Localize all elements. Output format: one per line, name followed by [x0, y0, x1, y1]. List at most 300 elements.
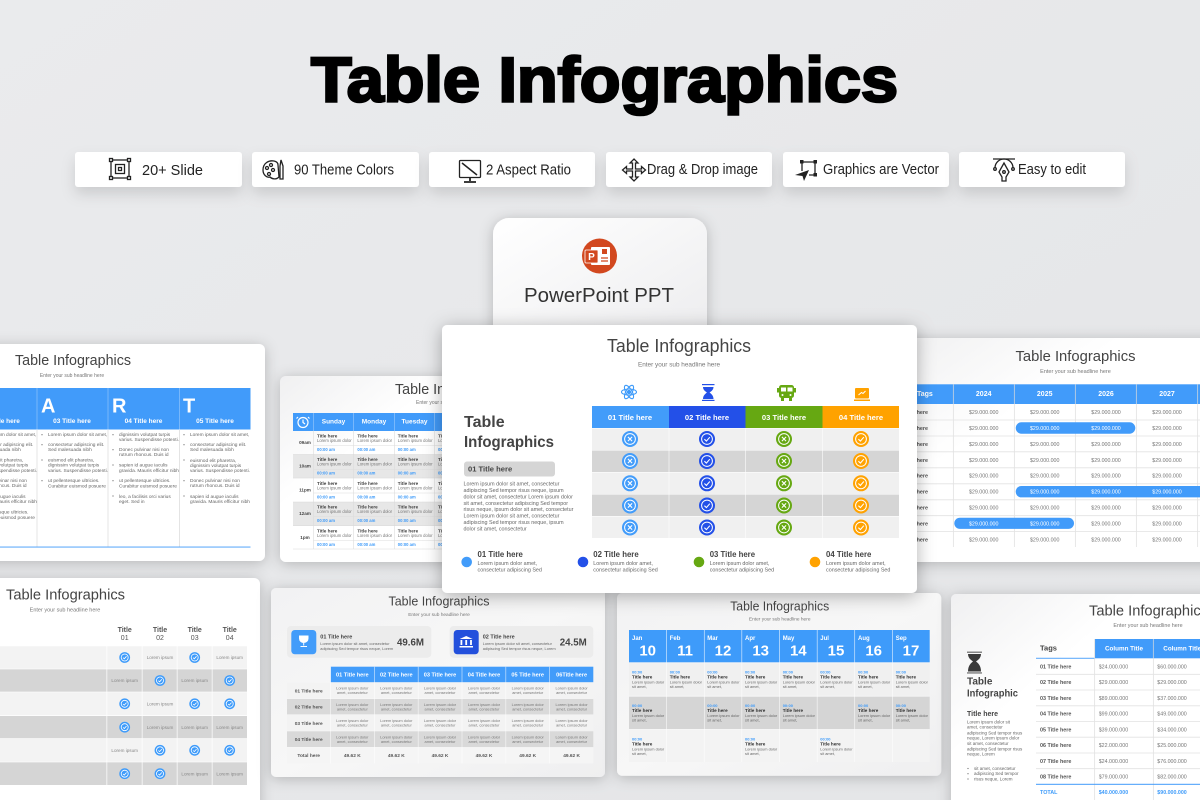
panel: column title table slide: sit amet, consectetur: [967, 741, 1009, 746]
panel: weekly schedule slide: Tuesday: [402, 418, 428, 426]
panel: weekly schedule slide: 00:00 am: [398, 542, 416, 547]
six column table: amet, consectetur: [425, 706, 456, 711]
panel: ART letter columns slide: [0, 344, 265, 561]
calendar row 2: Lorem ipsum dolor: [707, 713, 740, 718]
calendar row 1: Lorem ipsum dolor: [745, 680, 778, 684]
table rows: [592, 428, 899, 538]
stat: 49.6M: 49.6M: [397, 636, 424, 648]
panel: yearly values table slide: $29.000.000: [969, 537, 998, 543]
legend: 02: 02 Title here: [593, 550, 639, 559]
panel: yearly values table slide: Table Infographics: [1016, 348, 1136, 365]
calendar row 1: sit amet,: [707, 684, 722, 689]
panel: feature matrix slide: Lorem ipsum: [111, 678, 138, 683]
calendar row 3: Title here: [632, 741, 653, 746]
panel: ART letter columns slide: gravida. Mauris efficitur nibh: [190, 499, 250, 505]
panel: yearly values table slide: $29.000.000: [969, 458, 998, 464]
panel: yearly values table slide: $29.000.000: [1030, 442, 1059, 448]
calendar row 2: sit amet,: [632, 717, 647, 722]
pill: 20+ Slide: 20+ Slide: [142, 163, 203, 179]
calendar header dates: Sep: [896, 636, 907, 642]
icon: bus: [777, 385, 796, 401]
six column table: Lorem ipsum dolor: [468, 702, 501, 707]
six column table: amet, consectetur: [556, 722, 588, 728]
panel: column title table slide: 07 Title here: [1040, 759, 1071, 765]
panel: ART letter columns slide: rutrum rhoncus. Duis id: [119, 452, 169, 458]
panel: column title table slide: [951, 594, 1200, 800]
panel: weekly schedule slide: 11pm: [299, 487, 311, 492]
calendar row 2: 00:00: [858, 703, 869, 708]
six column table: amet, consectetur: [512, 722, 544, 728]
six column table: amet, consectetur: [337, 739, 368, 744]
panel: weekly schedule slide: 00:00 am: [357, 518, 376, 523]
panel: feature matrix slide: Lorem ipsum: [111, 748, 138, 753]
legend: 04: 04 Title here: [826, 550, 872, 559]
calendar row 2: Title here: [632, 708, 653, 713]
panel: yearly values table slide: $29.000.000: [969, 490, 998, 496]
calendar header dates: May: [783, 636, 795, 642]
panel: weekly schedule slide: 00:00 am: [317, 518, 335, 523]
panel: weekly schedule slide: Title here: [317, 434, 338, 438]
panel: yearly values table slide: here: [917, 522, 928, 528]
calendar row 2: sit amet,: [707, 717, 722, 722]
calendar row 2: Title here: [896, 708, 916, 713]
calendar header dates: 11: [677, 642, 693, 660]
legend: 04: Lorem ipsum dolor amet,: [826, 561, 886, 567]
calendar row 1: Lorem ipsum dolor: [896, 680, 929, 684]
panel: weekly schedule slide: Lorem ipsum dolor: [357, 462, 393, 467]
panel: column title table slide: 03 Title here: [1040, 696, 1071, 702]
six column table: Lorem ipsum dolor: [424, 734, 457, 739]
panel: ART letter columns slide: 04 Title here: [125, 418, 163, 425]
table header: 01 Title here: [608, 413, 652, 422]
panel: weekly schedule slide: Lorem ipsum dolor: [398, 533, 433, 538]
panel: feature matrix slide: 03: [191, 635, 199, 642]
six column table: 03 Title here: [295, 721, 323, 727]
panel: weekly schedule slide: Lorem ipsum dolor: [357, 485, 393, 490]
calendar row 2: sit amet,: [896, 717, 910, 722]
panel: weekly schedule slide: Lorem ipsum dolor: [438, 462, 473, 467]
panel: calendar table slide: [617, 593, 941, 776]
panel: column title table slide: $39.000.000: [1099, 727, 1128, 733]
panel: feature matrix slide: Lorem ipsum: [216, 771, 243, 776]
calendar row 1: 00:00: [632, 670, 643, 675]
calendar row 1: Title here: [707, 675, 728, 680]
legend: 01: 01 Title here: [478, 550, 524, 559]
panel: weekly schedule slide: 00:00 am: [438, 447, 456, 452]
calendar header dates: Feb: [670, 636, 681, 642]
six column table: Lorem ipsum dolor: [468, 734, 501, 739]
calendar row 1: sit amet,: [783, 684, 797, 689]
panel: feature matrix slide: Title: [118, 627, 132, 634]
six column table: amet, consectetur: [425, 722, 456, 728]
calendar row 2: [632, 703, 929, 722]
panel: weekly schedule slide: Title here: [317, 528, 338, 533]
panel: column title table slide: 01 Title here: [1040, 664, 1071, 670]
six column table: amet, consectetur: [425, 739, 456, 744]
panel: ART letter columns slide: consectetur adipiscing elit.: [48, 442, 104, 448]
panel: feature matrix slide: Title: [223, 627, 237, 634]
six column table: amet, consectetur: [469, 722, 500, 728]
calendar row 1: sit amet,: [745, 684, 760, 689]
panel: yearly values table slide: $29.000.000: [1091, 458, 1121, 464]
panel: weekly schedule slide: 00:00 am: [357, 447, 376, 452]
panel: weekly schedule slide: 00:00 am: [317, 447, 335, 452]
panel: ART letter columns slide: R: [112, 396, 127, 418]
panel: column title table slide: Column Title: [1105, 645, 1144, 652]
icon: hourglass: [967, 652, 982, 673]
panel: column title table slide: $29.000.000: [1157, 680, 1187, 686]
pill: Graphics are Vector: Graphics are Vector: [823, 162, 939, 178]
panel: weekly schedule slide: Lorem ipsum dolor: [398, 509, 433, 514]
panel: ART letter columns slide: sapien id augue iaculis: [190, 494, 239, 500]
panel: weekly schedule slide: Lorem ipsum dolor: [357, 509, 393, 514]
calendar row 1: [632, 670, 929, 689]
panel: weekly schedule slide: 00:00 am: [438, 518, 456, 523]
pill: 2 Aspect Ratio: [429, 152, 595, 187]
panel: yearly values table slide: $29.000.000: [1152, 426, 1182, 432]
panel: ART letter columns slide: ut pellentesque ultricies.: [119, 478, 170, 484]
pill: 20+ Slide: [75, 152, 242, 187]
calendar header dates: [632, 636, 919, 660]
panel: ART letter columns slide: varius. Suspendisse potenti.: [190, 468, 250, 474]
pill: Drag and Drop image: [606, 152, 772, 187]
six column table: 02 Title here: [380, 672, 413, 678]
six column table: Lorem ipsum dolor: [468, 686, 501, 690]
calendar row 2: Title here: [858, 708, 879, 713]
left heading: Table: [464, 414, 505, 431]
legend: 01: consectetur adipiscing Sed: [478, 567, 542, 573]
calendar row 1: Title here: [820, 675, 841, 680]
panel: weekly schedule slide: Lorem ipsum dolor: [398, 438, 433, 443]
panel: yearly values table slide: $29.000.000: [1152, 506, 1182, 512]
slide heading: Table Infographics: [607, 336, 751, 356]
panel: weekly schedule slide: 00:00 am: [398, 447, 416, 452]
calendar header dates: 14: [790, 642, 807, 660]
panel: ART letter columns slide: Curabitur euismod posuere: [48, 484, 106, 490]
panel: ART letter columns slide: eget. Sed in: [119, 499, 145, 505]
calendar row 2: 00:00: [896, 703, 907, 708]
panel: column title table slide: $89.000.000: [1099, 696, 1128, 702]
table header: 04 Title here: [839, 413, 883, 422]
panel: column title table slide: risus neque, Lorem: [974, 776, 1013, 781]
panel: weekly schedule slide: Lorem ipsum dolor: [398, 485, 433, 490]
panel: weekly schedule slide: 1pm: [300, 535, 310, 540]
panel: ART letter columns slide: leo, a facilisis orci varius: [119, 494, 171, 500]
six column table: 49.62 K: [344, 753, 361, 759]
calendar header dates: 12: [715, 642, 731, 660]
panel: ART letter columns slide: dignissim volutpat turpis: [119, 432, 171, 438]
panel: weekly schedule slide: Title here: [317, 481, 338, 486]
panel: yearly values table slide: here: [917, 458, 928, 464]
panel: weekly schedule slide: 00:00 am: [438, 494, 456, 499]
panel: column title table slide: $22.000.000: [1099, 743, 1128, 749]
panel: ART letter columns slide: dignissim volutpat turpis: [48, 462, 100, 468]
six column table: 03 Title here: [424, 672, 456, 678]
six column table: Lorem ipsum dolor: [380, 734, 413, 739]
calendar row 1: Title here: [783, 675, 803, 680]
six column table: [287, 667, 593, 763]
panel: ART letter columns slide: varius. Suspendisse potenti.: [48, 468, 108, 474]
panel: column title table slide: Tags: [1040, 644, 1057, 653]
slide sub heading: Enter your sub headline here: [638, 362, 720, 368]
calendar row 1: Title here: [670, 675, 690, 680]
panel: yearly values table slide: $29.000.000: [1152, 474, 1182, 480]
panel: ART letter columns slide: Donec pulvinar nisi non: [190, 478, 240, 484]
panel: weekly schedule slide: Title here: [317, 505, 338, 510]
legend: 03: 03 Title here: [710, 550, 756, 559]
panel: yearly values table slide: $29.000.000: [1030, 506, 1059, 512]
panel: yearly values table slide: here: [917, 410, 928, 416]
panel: yearly values table slide: $29.000.000: [1030, 522, 1059, 528]
panel: feature matrix slide: [0, 578, 260, 800]
panel: yearly values table slide: $29.000.000: [1152, 442, 1182, 448]
calendar row 1: sit amet,: [632, 684, 647, 689]
panel: column title table slide: $90.000.000: [1157, 790, 1187, 796]
calendar row 2: sit amet,: [783, 717, 797, 722]
six column table: Lorem ipsum dolor: [512, 718, 545, 723]
six column table: Total here: [297, 753, 320, 759]
icon: alarm clock: [296, 417, 310, 428]
panel: yearly values table slide: $29.000.000: [1030, 410, 1059, 416]
pill: 90 Theme Colors: [252, 152, 419, 187]
panel: ART letter columns slide: Lorem ipsum dolor sit amet,: [190, 432, 249, 438]
calendar header dates: 13: [752, 642, 769, 660]
panel: column title table slide: 06 Title here: [1040, 743, 1071, 749]
table header: 03 Title here: [762, 413, 806, 422]
six column table: Lorem ipsum dolor: [380, 718, 413, 723]
panel: column title table slide: $99.000.000: [1099, 712, 1128, 718]
stat: 49.6M: 01 Title here: [320, 634, 352, 640]
six column table: amet, consectetur: [512, 706, 544, 711]
panel: weekly schedule slide: 00:00 am: [317, 471, 335, 476]
panel: column title table slide: Lorem ipsum dolor sit: [967, 720, 1011, 724]
panel: column title table slide: adipiscing Sed tempor: [974, 771, 1019, 776]
six column table: amet, consectetur: [469, 739, 500, 744]
calendar header dates: Mar: [707, 636, 719, 642]
panel: weekly schedule slide: 00:00 am: [398, 494, 416, 499]
left paragraph: sit amet, consectetur adipiscing Sed tempor: [464, 501, 568, 507]
calendar row 3: Lorem ipsum dolor: [745, 746, 778, 751]
panel: yearly values table slide: 2026: [1098, 391, 1114, 398]
panel: weekly schedule slide: 00:00 am: [317, 494, 335, 499]
panel: ART letter columns slide: euismod elit pharetra,: [48, 458, 94, 464]
six column table: Lorem ipsum dolor: [512, 734, 545, 739]
panel: weekly schedule slide: [280, 376, 520, 562]
panel: weekly schedule slide: Lorem ipsum dolor: [438, 485, 473, 490]
calendar row 2: 00:00: [632, 703, 643, 708]
panel: yearly values table slide: here: [917, 442, 928, 448]
panel: feature matrix slide: Lorem ipsum: [216, 655, 243, 660]
panel: ART letter columns slide: varius. Suspendisse potenti.: [119, 437, 179, 443]
label: PowerPoint PPT: PowerPoint PPT: [524, 285, 674, 307]
six column table: amet, consectetur: [337, 722, 368, 728]
stat: 24.5M: Lorem ipsum dolor sit amet, consectetur: [483, 641, 553, 646]
panel: feature matrix slide: 04: [226, 635, 234, 642]
stat: 24.5M: adipiscing Sed tempor risus neque, Lorem: [483, 646, 556, 651]
pill: Graphics are Vector: [783, 152, 949, 187]
stat: 24.5M: [450, 626, 593, 658]
panel: weekly schedule slide: Lorem ipsum dolor: [438, 509, 473, 514]
panel: yearly values table slide: 2024: [976, 391, 992, 398]
stat: 49.6M: Lorem ipsum dolor sit amet, consectetur: [320, 641, 390, 646]
six column table: Lorem ipsum dolor: [380, 686, 413, 690]
panel: yearly values table slide: 2027: [1159, 391, 1175, 398]
panel: feature matrix slide: 02: [156, 635, 164, 642]
panel: weekly schedule slide: Title here: [398, 434, 419, 438]
panel: column title table slide: $49.000.000: [1157, 712, 1187, 718]
panel: yearly values table slide: $29.000.000: [1152, 522, 1182, 528]
panel: stats and six column table slide: [271, 588, 605, 777]
table header: 02 Title here: [685, 413, 729, 422]
six column table: Lorem ipsum dolor: [424, 718, 457, 723]
panel: yearly values table slide: here: [917, 506, 928, 512]
panel: ART letter columns slide: Lorem ipsum dolor sit amet,: [48, 432, 107, 438]
six column table: 49.62 K: [432, 753, 449, 759]
calendar row 1: Title here: [632, 675, 653, 680]
panel: weekly schedule slide: 00:00 am: [438, 471, 456, 476]
panel: yearly values table slide: $29.000.000: [969, 410, 998, 416]
six column table: 49.62 K: [563, 753, 581, 759]
panel: weekly schedule slide: Lorem ipsum dolor: [438, 438, 473, 443]
calendar row 3: 00:00: [632, 737, 643, 742]
calendar row 3: Lorem ipsum dolor: [632, 746, 665, 751]
panel: weekly schedule slide: Title here: [438, 457, 459, 462]
panel: yearly values table slide: $29.000.000: [1091, 506, 1121, 512]
calendar row 2: Lorem ipsum dolor: [858, 713, 891, 718]
panel: yearly values table slide: $29.000.000: [1030, 490, 1059, 496]
calendar row 1: sit amet,: [896, 684, 910, 689]
six column table: 01 Title here: [295, 688, 323, 694]
panel: weekly schedule slide: Lorem ipsum dolor: [357, 438, 393, 443]
panel: yearly values table slide: here: [917, 426, 928, 432]
stat: 24.5M: 02 Title here: [483, 634, 515, 640]
six column table: amet, consectetur: [337, 706, 368, 711]
panel: yearly values table slide: $29.000.000: [1030, 458, 1059, 464]
panel: weekly schedule slide: Lorem ipsum dolor: [317, 438, 352, 443]
calendar row 3: [632, 736, 853, 756]
panel: feature matrix slide: Lorem ipsum: [147, 702, 173, 706]
panel: feature matrix slide: Enter your sub headline here: [30, 607, 100, 613]
calendar row 1: 00:00: [745, 670, 756, 675]
panel: yearly values table slide: $29.000.000: [969, 474, 998, 480]
panel: yearly values table slide: $29.000.000: [1091, 410, 1121, 416]
six column table: amet, consectetur: [425, 690, 456, 695]
panel: yearly values table slide: $29.000.000: [1091, 537, 1121, 543]
calendar header dates: 17: [903, 642, 919, 660]
six column table: amet, consectetur: [469, 706, 500, 711]
panel: column title table slide: $82.000.000: [1157, 774, 1187, 780]
panel: yearly values table slide: [890, 338, 1200, 562]
panel: weekly schedule slide: Lorem ipsum dolor: [438, 533, 473, 538]
panel: column title table slide: TOTAL: [1040, 790, 1058, 796]
panel: yearly values table slide: $29.000.000: [1030, 426, 1059, 432]
panel: column title table slide: $25.000.000: [1157, 743, 1187, 749]
panel: weekly schedule slide: 10am: [299, 464, 311, 469]
left sub title pill: 01 Title here: [468, 464, 512, 474]
legend: 02: [578, 550, 658, 573]
six column table: Lorem ipsum dolor: [336, 734, 369, 739]
panel: yearly values table slide: $29.000.000: [1091, 442, 1121, 448]
calendar row 1: sit amet,: [858, 684, 873, 689]
panel: weekly schedule slide: Lorem ipsum dolor: [398, 462, 433, 467]
calendar row 2: 00:00: [707, 703, 718, 708]
panel: weekly schedule slide: Title here: [398, 481, 419, 486]
panel: ART letter columns slide: T: [183, 396, 195, 418]
panel: column title table slide: 04 Title here: [1040, 712, 1071, 718]
icon: laptop chart: [854, 388, 870, 401]
panel: weekly schedule slide: 00:00 am: [357, 471, 376, 476]
calendar header dates: Jan: [632, 636, 643, 642]
panel: weekly schedule slide: 00:00 am: [398, 518, 416, 523]
six column table: Lorem ipsum dolor: [555, 718, 588, 723]
main title: Table Infographics: [311, 46, 898, 116]
panel: column title table slide: $24.000.000: [1099, 664, 1128, 670]
panel: column title table slide: Enter your sub headline here: [1113, 623, 1183, 629]
panel: stats and six column table slide: Enter your sub headline here: [408, 612, 470, 618]
icon: atom: [622, 384, 636, 400]
panel: feature matrix slide: Lorem ipsum: [181, 771, 208, 776]
panel: column title table slide: $79.000.000: [1099, 774, 1128, 780]
panel: column title table slide: $60.000.000: [1157, 664, 1187, 670]
six column table: amet, consectetur: [381, 739, 412, 744]
six column table: amet, consectetur: [381, 722, 412, 728]
calendar row 1: Lorem ipsum dolor: [707, 680, 740, 684]
calendar row 1: 00:00: [783, 670, 794, 675]
pill: Drag and Drop image: Drag & Drop image: [647, 162, 758, 178]
six column table: 05 Title here: [511, 672, 544, 678]
left paragraph: adipiscing Sed tempor risus neque, ipsum: [464, 488, 564, 494]
legend: 03: [694, 550, 774, 573]
calendar row 1: Title here: [858, 675, 879, 680]
panel: column title table slide: 02 Title here: [1040, 680, 1071, 686]
six column table: amet, consectetur: [381, 690, 412, 695]
panel: weekly schedule slide: Title here: [438, 528, 459, 533]
panel: column title table slide: neque, Lorem: [967, 752, 995, 757]
calendar row 2: sit amet,: [858, 717, 873, 722]
panel: feature matrix slide: Title: [188, 627, 202, 634]
panel: column title table slide: $76.000.000: [1157, 759, 1187, 765]
panel: ART letter columns slide: euismod elit pharetra,: [190, 458, 236, 464]
panel: column title table slide: 08 Title here: [1040, 774, 1071, 780]
left paragraph: risus neque, ipsum dolor sit amet, consectetur: [464, 507, 574, 513]
panel: ART letter columns slide: A: [41, 396, 55, 418]
calendar row 3: Title here: [745, 741, 766, 746]
panel: weekly schedule slide: Sunday: [322, 418, 346, 426]
panel: column title table slide: Infographic: [967, 689, 1018, 700]
panel: yearly values table slide: $29.000.000: [1091, 474, 1121, 480]
panel: yearly values table slide: $29.000.000: [1030, 474, 1059, 480]
calendar row 3: Title here: [820, 741, 841, 746]
left paragraph: Lorem ipsum dolor sit amet, consectetur: [464, 482, 560, 488]
panel: calendar table slide: Enter your sub headline here: [749, 617, 811, 623]
panel: column title table slide: $34.000.000: [1157, 727, 1187, 733]
calendar row 2: Title here: [783, 708, 803, 713]
calendar row 2: Title here: [707, 708, 728, 713]
calendar row 1: 00:00: [896, 670, 907, 675]
panel: column title table slide: amet, consectetur: [967, 725, 1003, 730]
panel: yearly values table slide: Tags: [917, 391, 933, 398]
six column table: Lorem ipsum dolor: [336, 718, 369, 723]
panel: ART letter columns slide: Table Infographics: [15, 353, 131, 369]
pill: Easy to edit: Easy to edit: [1018, 162, 1086, 178]
panel: ART letter columns slide: Enter your sub headline here: [40, 373, 104, 379]
panel: weekly schedule slide: Title here: [438, 505, 459, 510]
six column table: amet, consectetur: [556, 706, 588, 711]
six column table: Lorem ipsum dolor: [336, 702, 369, 707]
six column table: amet, consectetur: [512, 690, 544, 695]
panel: yearly values table slide: here: [917, 474, 928, 480]
pill: 2 Aspect Ratio: 2 Aspect Ratio: [486, 162, 571, 178]
